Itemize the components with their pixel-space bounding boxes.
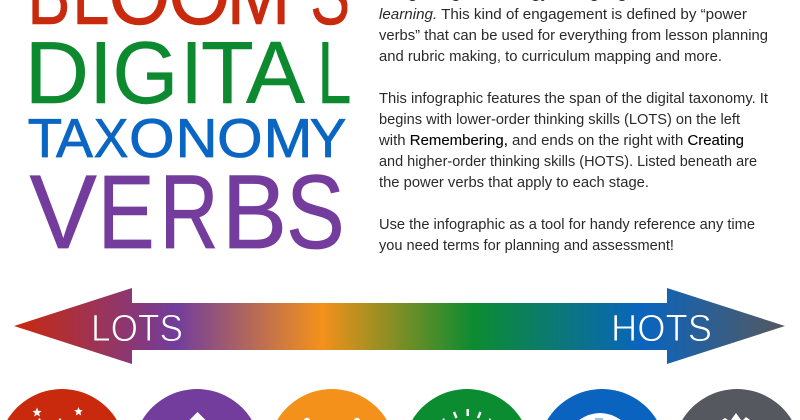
title line: Taxonomy: T — [28, 108, 62, 169]
title line: Verbs: B — [222, 154, 287, 271]
title — [25, 0, 351, 271]
icon: purple circle, diamond — [142, 389, 252, 420]
icon: green circle, light rays — [412, 389, 522, 420]
icon: gray circle, flame — [682, 389, 792, 420]
title line: Digital: D — [25, 23, 89, 122]
paragraph 1 (top line cropped by the frame): learning. This kind of engagement is defined by “power — [379, 7, 747, 23]
double-headed gradient arrow — [14, 288, 785, 364]
title line: Taxonomy: O — [217, 108, 263, 169]
title line: Verbs — [30, 154, 345, 271]
arrow shape — [14, 288, 785, 364]
paragraph 2: the power verbs that apply to each stage. — [379, 175, 649, 191]
paragraph 2: with Remembering, and ends on the right with Creating — [378, 133, 744, 149]
title line: Verbs: S — [286, 154, 345, 271]
title line: Digital: L — [318, 23, 351, 122]
paragraph 2 — [378, 91, 768, 191]
title line: Digital: G — [112, 23, 178, 122]
paragraph 3 — [379, 217, 755, 254]
title line: Verbs: V — [30, 154, 97, 271]
title line: Digital — [25, 23, 351, 122]
paragraph 2: begins with lower-order thinking skills (LOTS) on the left — [379, 112, 740, 128]
title line: Taxonomy: M — [264, 108, 312, 169]
icon: orange circle, dots — [277, 389, 387, 420]
intro text block — [378, 0, 768, 254]
paragraph 3: you need terms for planning and assessment! — [379, 238, 674, 254]
title line: Verbs: E — [98, 154, 155, 271]
icon: red circle, stars — [7, 389, 117, 420]
title line: Digital: I — [89, 23, 113, 122]
title line: Bloom's — [27, 0, 350, 43]
title line: Digital: A — [246, 23, 305, 122]
title line: Digital: I — [181, 23, 203, 122]
title line: Taxonomy: X — [94, 108, 128, 169]
paragraph 1 (top line cropped by the frame): and rubric making, to curriculum mapping and more. — [379, 49, 722, 65]
title line: Taxonomy — [28, 108, 346, 169]
paragraph 3: Use the infographic as a tool for handy reference any time — [379, 217, 755, 233]
title line: Taxonomy: O — [129, 108, 175, 169]
paragraph 2: and higher-order thinking skills (HOTS). Listed beneath are — [379, 154, 757, 170]
title line: Taxonomy: N — [176, 108, 218, 169]
label: LOTS: LOTS — [91, 308, 183, 350]
paragraph 1 (top line cropped by the frame): verbs” that can be used for everything from lesson planning — [379, 28, 768, 44]
title line: Digital: T — [201, 23, 254, 122]
title line: Verbs: R — [160, 154, 218, 271]
icon: blue circle, eye — [547, 389, 657, 420]
paragraph 1 (top line cropped by the frame) — [379, 0, 768, 65]
label: HOTS: HOTS — [611, 308, 712, 350]
title line: Taxonomy: A — [56, 108, 94, 169]
paragraph 2: This infographic features the span of the digital taxonomy. It — [379, 91, 768, 107]
title line: Taxonomy: Y — [310, 108, 346, 169]
